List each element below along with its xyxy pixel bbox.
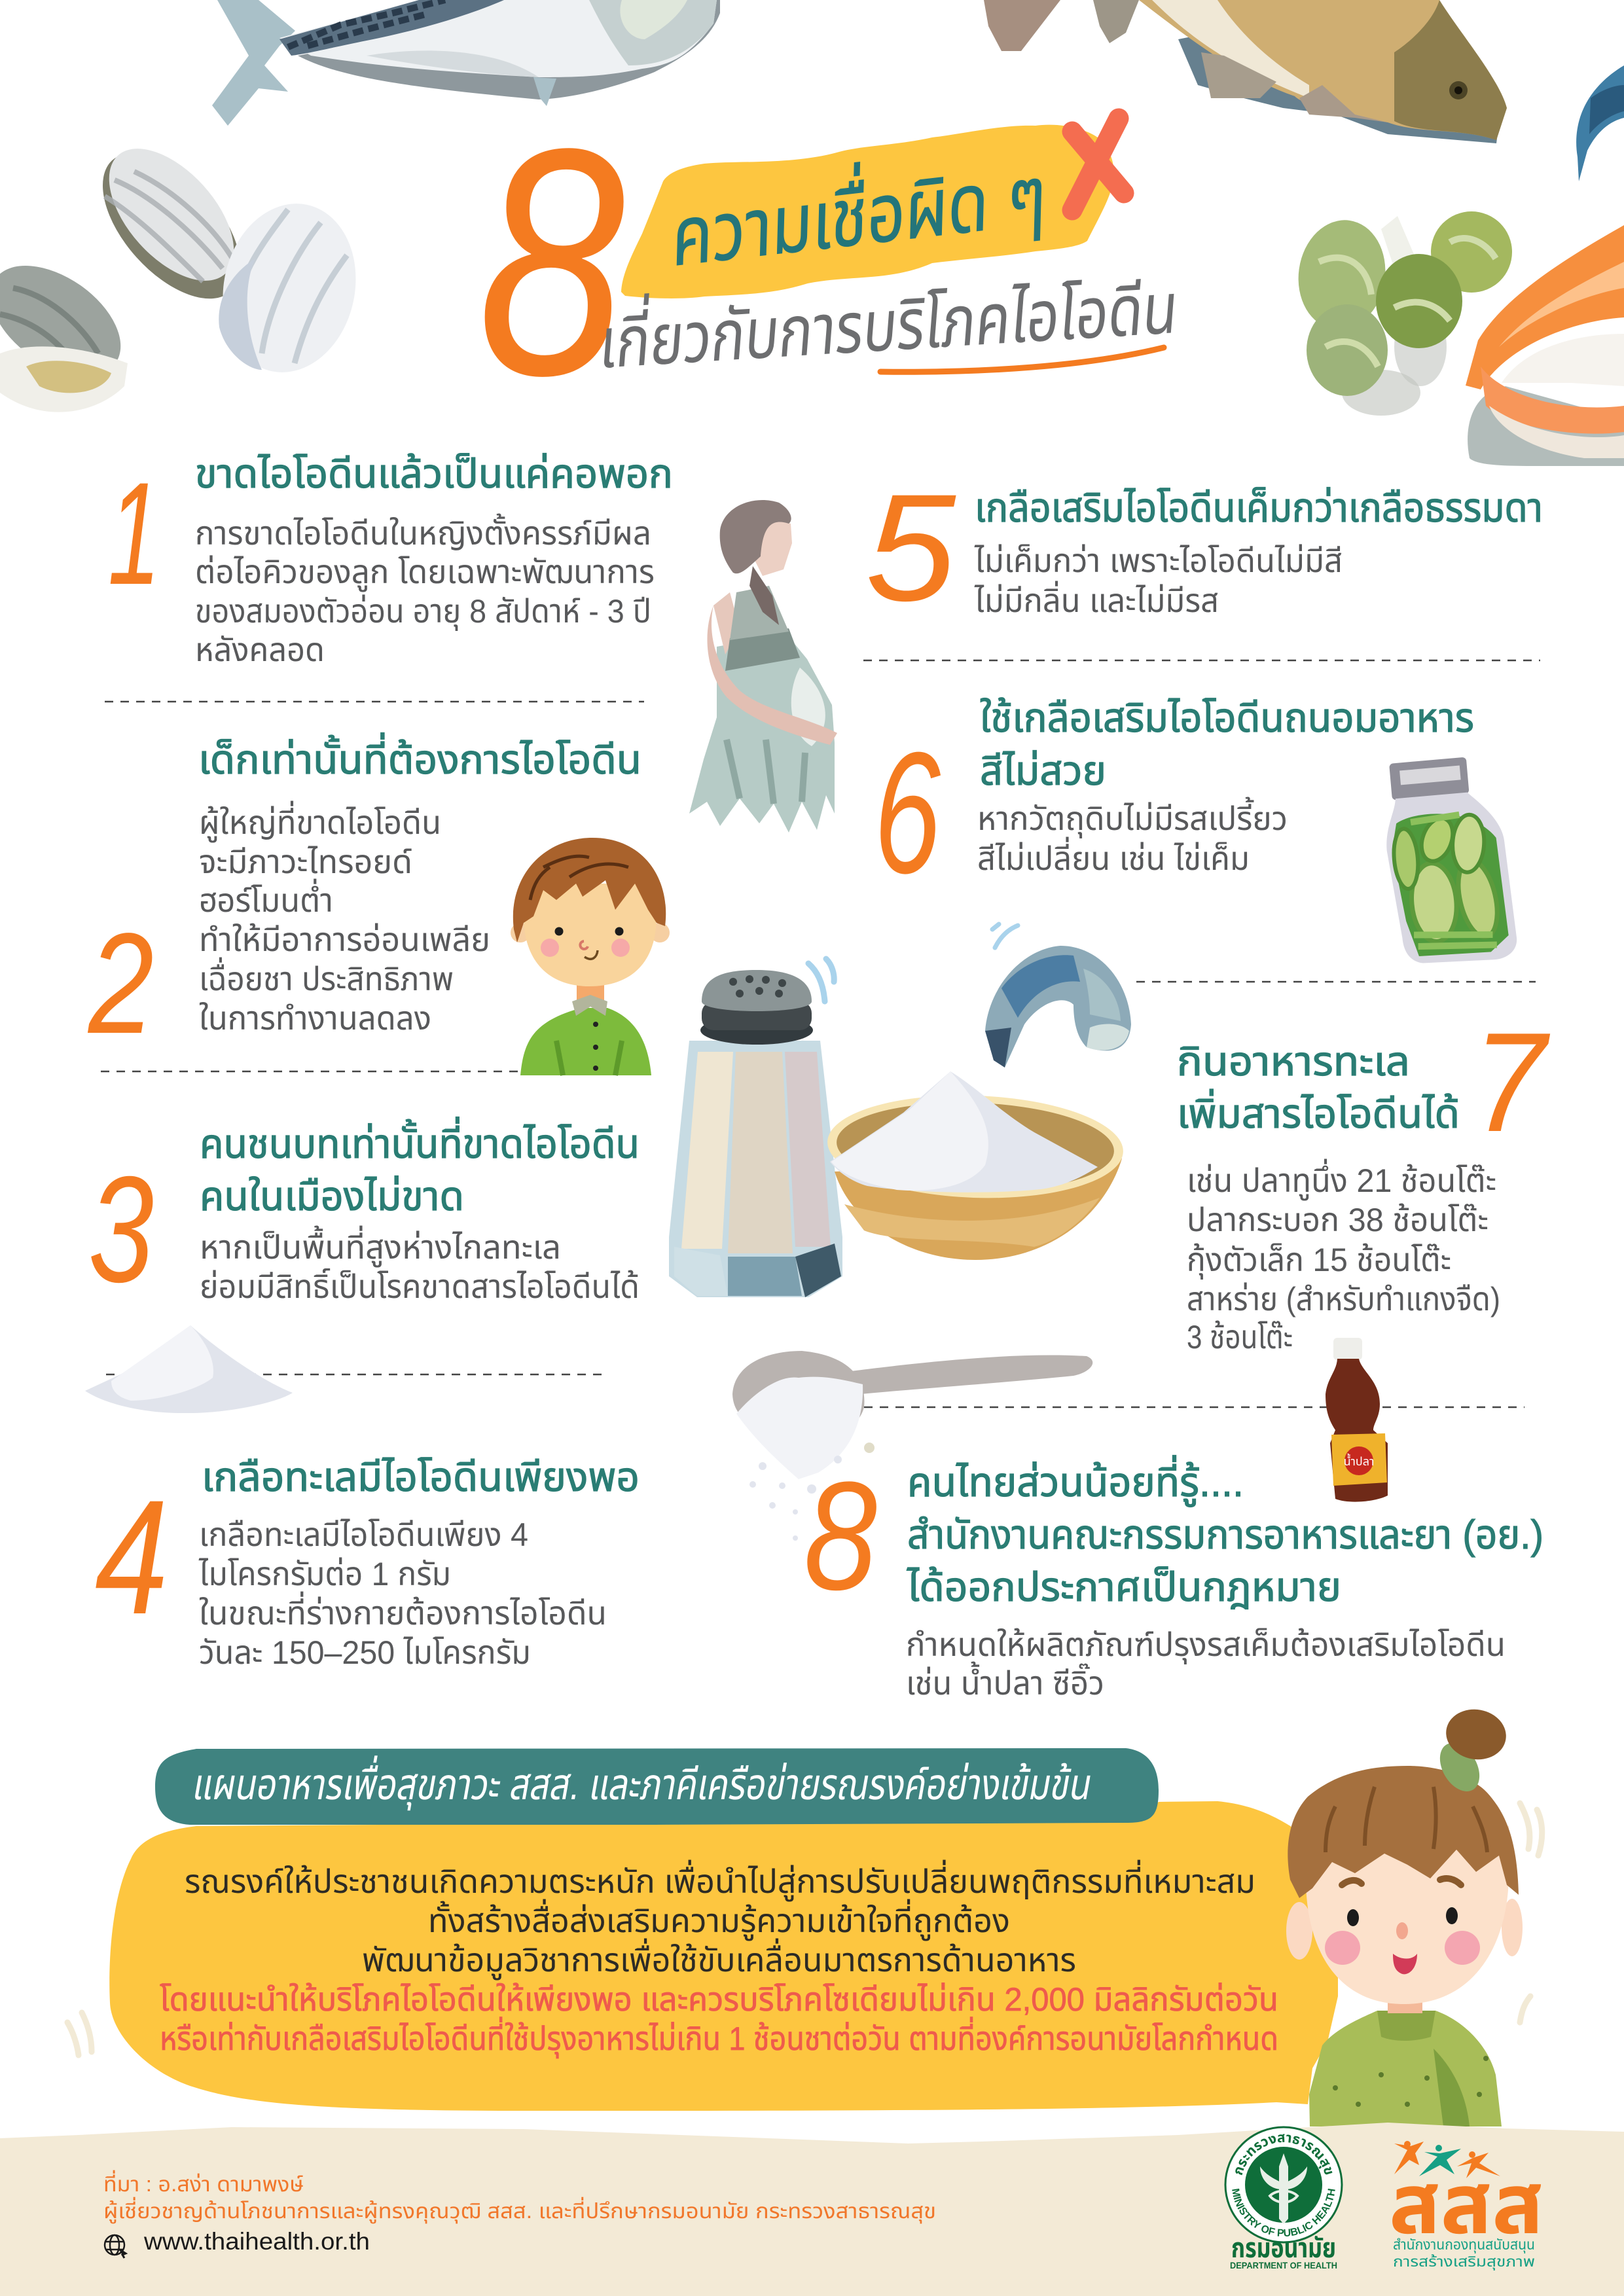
body 2: ผู้ใหญ่ที่ขาดไอโอดีน	[199, 800, 441, 842]
panel: myth 3	[88, 1117, 640, 1314]
body 1: หลังคลอด	[195, 632, 325, 668]
body 7: เช่น ปลาทูนึ่ง 21 ช้อนโต๊ะ	[1187, 1158, 1496, 1200]
numeral 6: 6	[874, 716, 941, 909]
illustration: pickle jar	[1379, 754, 1519, 968]
callout text: ทั้งสร้างสื่อส่งเสริมความรู้ความเข้าใจที่ถูกต้อง	[428, 1899, 1010, 1941]
callout text	[160, 1859, 1278, 2058]
body 1: ต่อไอคิวของลูก โดยเฉพาะพัฒนาการ	[195, 554, 655, 592]
body 7: 3 ช้อนโต๊ะ	[1187, 1319, 1293, 1355]
body 7	[1187, 1158, 1500, 1355]
body 5: ไม่มีกลิ่น และไม่มีรส	[974, 581, 1219, 619]
body 3: หากเป็นพื้นที่สูงห่างไกลทะเล	[200, 1225, 561, 1267]
logo: department of health: MINISTRY OF PUBLIC HEALTH	[1232, 2189, 1335, 2236]
logo: department of health: กระทรวงสาธารณสุข	[1235, 2134, 1333, 2176]
body 1: ของสมองตัวอ่อน อายุ 8 สัปดาห์ - 3 ปี	[195, 593, 651, 631]
body 6: หากวัตถุดิบไม่มีรสเปรี้ยว	[977, 797, 1288, 838]
body 4: ในขณะที่ร่างกายต้องการไอโอดีน	[199, 1591, 607, 1632]
heading 8: คนไทยส่วนน้อยที่รู้....	[907, 1455, 1244, 1507]
title: coral cross mark	[1072, 118, 1124, 210]
callout heading banner	[155, 1748, 1159, 1825]
body 7: กุ้งตัวเล็ก 15 ช้อนโต๊ะ	[1187, 1242, 1451, 1280]
panel: myth 4	[95, 1455, 640, 1671]
body 5: ไม่เค็มกว่า เพราะไอโอดีนไม่มีสี	[974, 543, 1343, 579]
panel: myth 8	[804, 1450, 1543, 1702]
body 6	[977, 797, 1288, 877]
motion lines: salt shaker	[808, 959, 834, 1001]
numeral 2: 2	[87, 904, 154, 1064]
logo: department of health	[1224, 2126, 1343, 2270]
illustration: pregnant woman	[689, 500, 837, 833]
footer source text: ที่มา : อ.สง่า ดามาพงษ์	[103, 2170, 304, 2196]
callout: yellow panel	[109, 1801, 1338, 2111]
panel: myth 1	[108, 452, 673, 668]
body 2: เฉื่อยชา ประสิทธิภาพ	[199, 957, 454, 997]
logo wordmark: สสส	[1389, 2158, 1543, 2251]
illustration: salt bowl	[825, 1071, 1125, 1260]
heading 4: เกลือทะเลมีไอโอดีนเพียงพอ	[202, 1455, 640, 1500]
heading 8: สำนักงานคณะกรรมการอาหารและยา (อย.)	[907, 1513, 1543, 1558]
illustration: brussels sprouts	[1291, 211, 1512, 416]
illustration: fish sauce bottle: น้ำปลา	[1344, 1453, 1374, 1468]
heading 7: เพิ่มสารไอโอดีนได้	[1177, 1089, 1460, 1137]
banner text: แผนอาหารเพื่อสุขภาวะ สสส. และภาคีเครือข่ายรณรงค์อย่างเข้มข้น	[189, 1755, 1097, 1810]
motion lines: shrimp	[992, 924, 1018, 948]
footer website: www.thaihealth.or.th	[143, 2228, 370, 2255]
illustration: fish sauce bottle	[1326, 1338, 1388, 1502]
motion lines: right of girl	[1520, 1803, 1542, 2022]
callout text: พัฒนาข้อมูลวิชาการเพื่อใช้ขับเคลื่อนมาตรการด้านอาหาร	[362, 1938, 1076, 1980]
body 6: สีไม่เปลี่ยน เช่น ไข่เค็ม	[977, 836, 1250, 877]
heading 6: ใช้เกลือเสริมไอโอดีนถนอมอาหาร	[980, 696, 1474, 741]
heading 6: สีไม่สวย	[980, 749, 1106, 794]
body 2: ทำให้มีอาการอ่อนเพลีย	[199, 922, 490, 958]
body 3: ย่อมมีสิทธิ์เป็นโรคขาดสารไอโอดีนได้	[200, 1268, 640, 1305]
heading 7	[1177, 1039, 1460, 1137]
heading 8: ได้ออกประกาศเป็นกฎหมาย	[907, 1565, 1341, 1610]
title underline	[880, 348, 1164, 372]
title text line 1: ความเชื่อผิด ๆ	[671, 141, 1048, 283]
numeral 1: 1	[108, 452, 160, 615]
body 2	[199, 800, 490, 1037]
panel: myth 6	[874, 696, 1474, 909]
footer source text: ผู้เชี่ยวชาญด้านโภชนาการและผู้ทรงคุณวุฒิ สสส. และที่ปรึกษากรมอนามัย กระทรวงสาธารณสุข	[103, 2197, 936, 2224]
illustration: carp fish	[984, 0, 1507, 143]
numeral 5: 5	[865, 463, 956, 633]
panel: myth 5	[865, 463, 1543, 633]
illustration: shrimp at top right edge	[1576, 65, 1624, 181]
footer source text	[103, 2170, 936, 2224]
panel: myth 2	[87, 732, 641, 1064]
logo people figures	[1394, 2141, 1500, 2178]
illustration: clams	[0, 126, 371, 412]
illustration: boy	[511, 838, 670, 1075]
heading 3: คนในเมืองไม่ขาด	[200, 1174, 464, 1219]
body 8: เช่น น้ำปลา ซีอิ๊ว	[906, 1661, 1104, 1702]
numeral 4: 4	[95, 1466, 168, 1648]
body 2: จะมีภาวะไทรอยด์	[199, 844, 412, 880]
title: yellow highlight and line 1	[621, 125, 1114, 298]
numeral 3: 3	[88, 1145, 154, 1314]
logo: thaihealth: การสร้างเสริมสุขภาพ	[1393, 2253, 1535, 2270]
heading 1: ขาดไอโอดีนแล้วเป็นแค่คอพอก	[195, 452, 673, 497]
illustration: shrimp	[985, 946, 1131, 1067]
illustration: salt shaker	[669, 970, 842, 1297]
body 4: เกลือทะเลมีไอโอดีนเพียง 4	[199, 1516, 528, 1553]
callout text: รณรงค์ให้ประชาชนเกิดความตระหนัก เพื่อนำไปสู่การปรับเปลี่ยนพฤติกรรมที่เหมาะสม	[185, 1859, 1255, 1901]
body 2: ฮอร์โมนต่ำ	[199, 878, 333, 919]
body 4: วันละ 150–250 ไมโครกรัม	[199, 1634, 531, 1671]
icon: globe with cursor	[105, 2235, 126, 2258]
body 4	[198, 1516, 607, 1671]
illustration: girl	[1286, 1705, 1523, 2126]
body 1: การขาดไอโอดีนในหญิงตั้งครรภ์มีผล	[195, 513, 651, 552]
heading 3: คนชนบทเท่านั้นที่ขาดไอโอดีน	[200, 1117, 640, 1167]
logo: thaihealth	[1389, 2141, 1543, 2270]
logo caption: สำนักงานกองทุนสนับสนุน	[1393, 2236, 1535, 2253]
heading 2: เด็กเท่านั้นที่ต้องการไอโอดีน	[198, 732, 641, 783]
illustration: spoon of salt	[732, 1351, 1092, 1541]
title text line 2: เกี่ยวกับการบริโภคไอโอดีน	[597, 260, 1182, 383]
illustration: salmon slices	[1466, 225, 1624, 466]
body 3	[200, 1225, 640, 1305]
motion lines: left of callout	[67, 2013, 92, 2055]
heading 8	[907, 1455, 1543, 1610]
callout text: โดยแนะนำให้บริโภคไอโอดีนให้เพียงพอ และควรบริโภคโซเดียมไม่เกิน 2,000 มิลลิกรัมต่อวัน	[160, 1981, 1278, 2018]
numeral 7: 7	[1473, 1003, 1550, 1161]
footer background	[0, 2123, 1624, 2296]
body 7: ปลากระบอก 38 ช้อนโต๊ะ	[1187, 1202, 1489, 1238]
title: big numeral 8: 8	[478, 81, 627, 442]
body 1	[195, 513, 655, 668]
body 8	[906, 1626, 1506, 1702]
numeral 8: 8	[804, 1450, 877, 1623]
callout text: หรือเท่ากับเกลือเสริมไอโอดีนที่ใช้ปรุงอาหารไม่เกิน 1 ช้อนชาต่อวัน ตามที่องค์การอนามัยโลกกำหนด	[160, 2017, 1278, 2058]
body 4: ไมโครกรัมต่อ 1 กรัม	[198, 1556, 451, 1592]
heading 7: กินอาหารทะเล	[1177, 1039, 1410, 1085]
logo: department of health: DEPARTMENT OF HEALTH	[1230, 2260, 1337, 2270]
body 2: ในการทำงานลดลง	[199, 1000, 431, 1037]
panel: myth 7	[1177, 1003, 1550, 1355]
illustration: salt pile	[85, 1325, 293, 1413]
logo: department of health: กรมอนามัย	[1231, 2233, 1336, 2263]
heading 6	[980, 696, 1474, 794]
body 7: สาหร่าย (สำหรับทำแกงจืด)	[1187, 1281, 1500, 1318]
body 8: กำหนดให้ผลิตภัณฑ์ปรุงรสเค็มต้องเสริมไอโอดีน	[906, 1626, 1506, 1664]
heading 3	[200, 1117, 640, 1219]
heading 5: เกลือเสริมไอโอดีนเค็มกว่าเกลือธรรมดา	[975, 486, 1543, 531]
illustration: mackerel fish	[212, 0, 720, 126]
body 5	[974, 543, 1343, 619]
